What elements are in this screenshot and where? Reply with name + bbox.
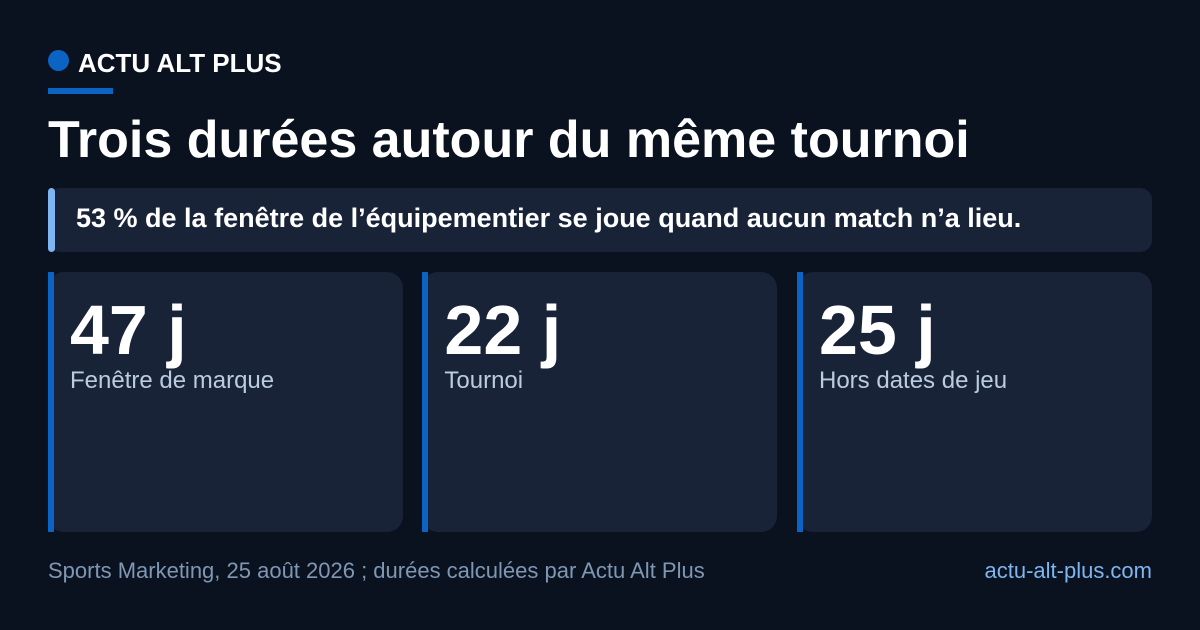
panel: tournament	[422, 272, 777, 532]
label: Fenêtre de marque	[70, 367, 274, 394]
panel accent bar	[797, 272, 803, 532]
title: Trois durées autour du même tournoi	[48, 111, 970, 169]
callout	[48, 188, 1152, 252]
panel: outside match dates	[797, 272, 1152, 532]
brand underline	[48, 88, 112, 94]
value: 47 j	[70, 291, 187, 369]
icon: brand dot	[48, 50, 69, 71]
callout text: 53 % de la fenêtre de l’équipementier se joue quand aucun match n’a lieu.	[76, 203, 1021, 233]
panel accent bar	[422, 272, 428, 532]
source note: Sports Marketing, 25 août 2026 ; durées calculées par Actu Alt Plus	[48, 558, 705, 583]
panel: brand window	[48, 272, 403, 532]
value: 25 j	[819, 291, 936, 369]
site link: actu-alt-plus.com	[984, 558, 1152, 583]
panel accent bar	[48, 272, 54, 532]
callout accent bar	[48, 188, 55, 252]
label: Tournoi	[444, 367, 523, 394]
value: 22 j	[444, 291, 561, 369]
label: Hors dates de jeu	[819, 367, 1007, 394]
brand name: ACTU ALT PLUS	[78, 48, 282, 78]
brand header	[48, 48, 282, 94]
